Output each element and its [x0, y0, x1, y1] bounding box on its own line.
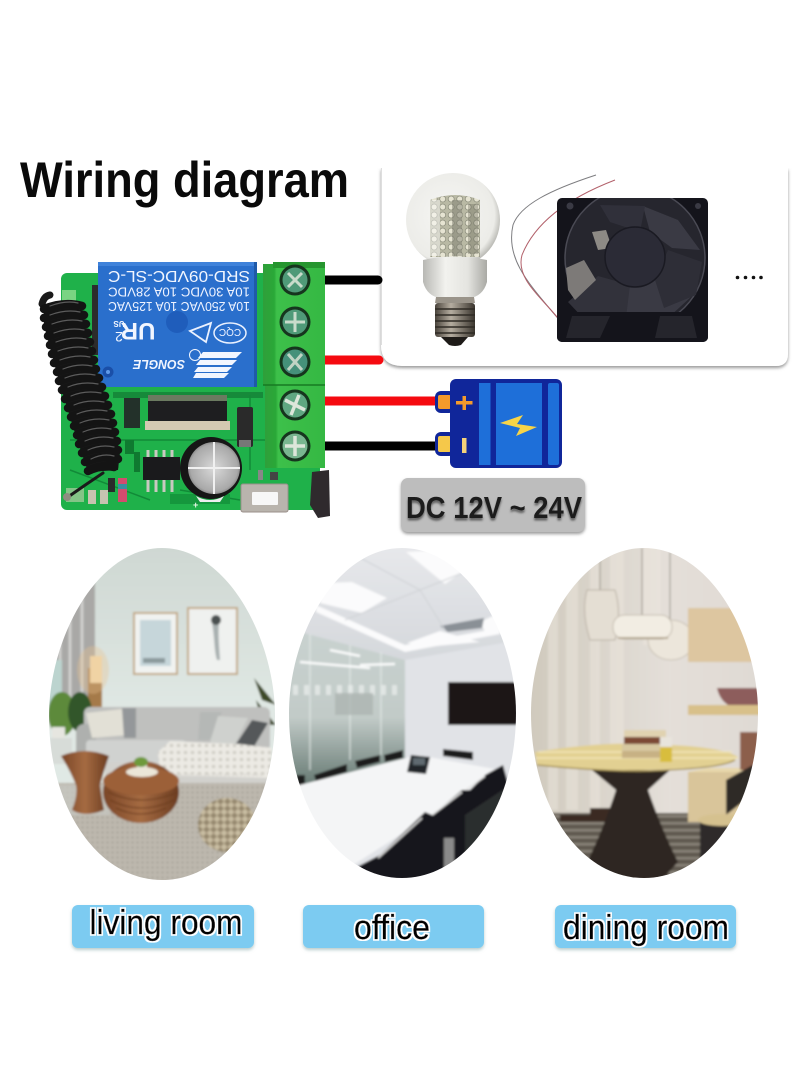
coffee table	[103, 757, 179, 823]
glass of juice	[660, 737, 672, 762]
certification marks: CQC	[219, 326, 241, 337]
photo: living room	[40, 540, 280, 885]
minus sign	[462, 438, 466, 453]
lightning bolt	[500, 415, 537, 436]
voltage label: DC 12V ~ 24V	[406, 490, 582, 525]
push button	[241, 484, 288, 512]
table base	[588, 770, 678, 882]
screw 4	[280, 390, 310, 420]
near chairs	[355, 765, 510, 885]
photo: office	[289, 548, 516, 878]
certification marks: UR	[121, 317, 155, 344]
coiled antenna	[42, 295, 120, 501]
label: living room: living room	[90, 904, 242, 942]
photo: dining room	[525, 540, 765, 885]
screw 2	[280, 306, 310, 338]
icon: led bulb	[406, 173, 500, 346]
floor rug	[553, 812, 702, 876]
curtain	[56, 583, 96, 698]
relay rating ac: 10A 250VAC 10A 125VAC	[108, 299, 250, 314]
plant right	[254, 678, 276, 725]
microcontroller chip	[143, 450, 180, 492]
screw 1	[280, 264, 310, 296]
relay model text: SRD-09VDC-SL-C	[108, 267, 250, 284]
plus sign	[456, 396, 472, 410]
relay	[98, 262, 257, 387]
pendant cords	[600, 548, 670, 622]
ceiling lights	[316, 550, 500, 652]
rug	[58, 782, 266, 880]
pendant lamps	[585, 590, 694, 660]
round table top	[535, 744, 738, 771]
brand logo	[190, 350, 242, 378]
circuit board	[61, 273, 320, 510]
far chairs	[296, 749, 473, 787]
conference table	[299, 757, 494, 864]
voltage label	[401, 478, 585, 532]
sofa	[76, 707, 275, 784]
wall shelf box	[688, 608, 758, 662]
circuit board: +	[193, 500, 198, 510]
side connector	[310, 470, 330, 518]
small ic block	[124, 395, 253, 447]
title: Wiring diagram	[20, 152, 349, 208]
capacitor	[180, 437, 242, 502]
pouf	[198, 798, 256, 852]
label: office: office	[354, 909, 430, 947]
certification marks	[113, 317, 246, 345]
bowl and shelf	[688, 688, 760, 715]
stacked books	[622, 730, 666, 758]
terminal block	[263, 262, 325, 468]
relay module	[42, 262, 330, 518]
ceiling	[322, 635, 502, 659]
ellipsis dots	[736, 276, 763, 279]
label: office	[303, 905, 484, 948]
certification marks: US	[113, 319, 125, 328]
glass wall	[285, 628, 405, 790]
plant left	[48, 692, 92, 764]
panel: loads	[379, 168, 790, 370]
icon: cooling fan	[511, 175, 708, 342]
screw 5	[280, 430, 310, 462]
certification marks: 2	[115, 329, 123, 345]
lower cabinet	[686, 730, 758, 858]
wall art left	[133, 612, 178, 675]
relay brand: SONGLE	[133, 357, 185, 372]
screw 3	[280, 346, 310, 378]
wires: load and power	[322, 280, 437, 446]
side table	[61, 751, 109, 814]
icon: battery	[435, 379, 562, 468]
floor lamp	[77, 646, 109, 718]
vertical blinds	[548, 552, 622, 810]
label: dining room: dining room	[563, 909, 729, 947]
phone	[407, 755, 430, 774]
wall art right	[187, 607, 238, 675]
relay rating dc: 10A 30VDC 10A 28VDC	[108, 284, 250, 300]
tv screen	[448, 682, 518, 725]
